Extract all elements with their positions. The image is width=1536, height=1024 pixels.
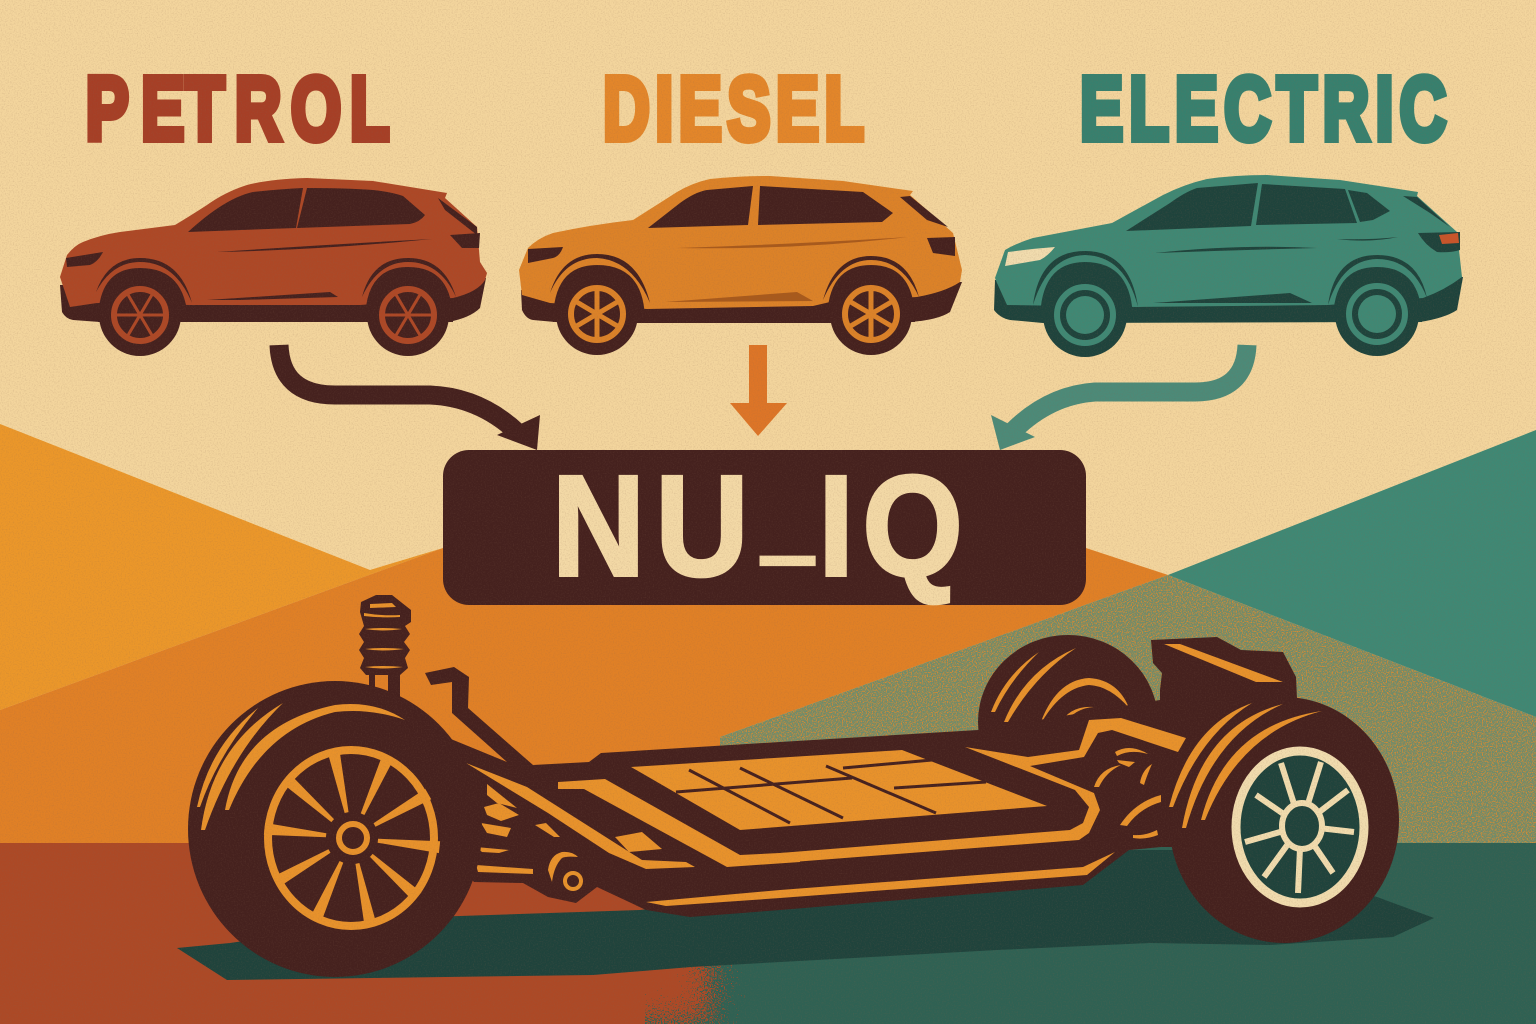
background: dark orange wedge (0, 548, 1168, 843)
arrow: petrol to NU_IQ (279, 345, 540, 450)
label text: IQ (818, 446, 963, 607)
label text (552, 416, 963, 607)
label text: NU (552, 446, 749, 607)
background: olive orange speckle (720, 575, 1536, 843)
car: electric (994, 175, 1463, 357)
front suspension (476, 784, 581, 889)
coil spring (359, 595, 411, 705)
arrow: electric to NU_IQ (991, 345, 1247, 450)
far rear wheel (978, 635, 1158, 809)
car: diesel (519, 176, 962, 355)
ground: green band (0, 843, 1536, 1024)
electric tail light (1439, 233, 1459, 244)
arrow: diesel to NU_IQ (730, 345, 787, 436)
rear wheel (1169, 697, 1399, 943)
heading: diesel: DIESEL (603, 58, 869, 159)
petrol rear wheel (367, 274, 449, 356)
rear motor housing (1151, 637, 1298, 720)
ground: red band (0, 843, 710, 1024)
front wheel (188, 681, 482, 977)
diesel rear wheel (830, 273, 912, 355)
car: petrol (60, 178, 487, 356)
main frame (400, 667, 1290, 917)
electric headlight (1005, 247, 1055, 266)
chassis: skateboard platform (188, 595, 1399, 977)
background: olive blended wedge (720, 575, 1536, 843)
diesel front wheel (556, 273, 638, 355)
label box: NU_IQ (443, 416, 1086, 607)
label text: _ (760, 416, 815, 577)
rear suspension (1094, 748, 1161, 839)
background: green wedge (1168, 430, 1536, 717)
ground: chassis shadow (177, 850, 1434, 980)
electric rear wheel (1335, 272, 1419, 356)
background: light orange wedge (0, 424, 443, 710)
frame rails (466, 718, 1186, 906)
electric front wheel (1043, 273, 1127, 357)
heading: petrol: PETROL (86, 58, 390, 159)
battery pack (631, 750, 1047, 830)
petrol front wheel (99, 274, 181, 356)
heading: electric: ELECTRIC (1080, 58, 1452, 159)
